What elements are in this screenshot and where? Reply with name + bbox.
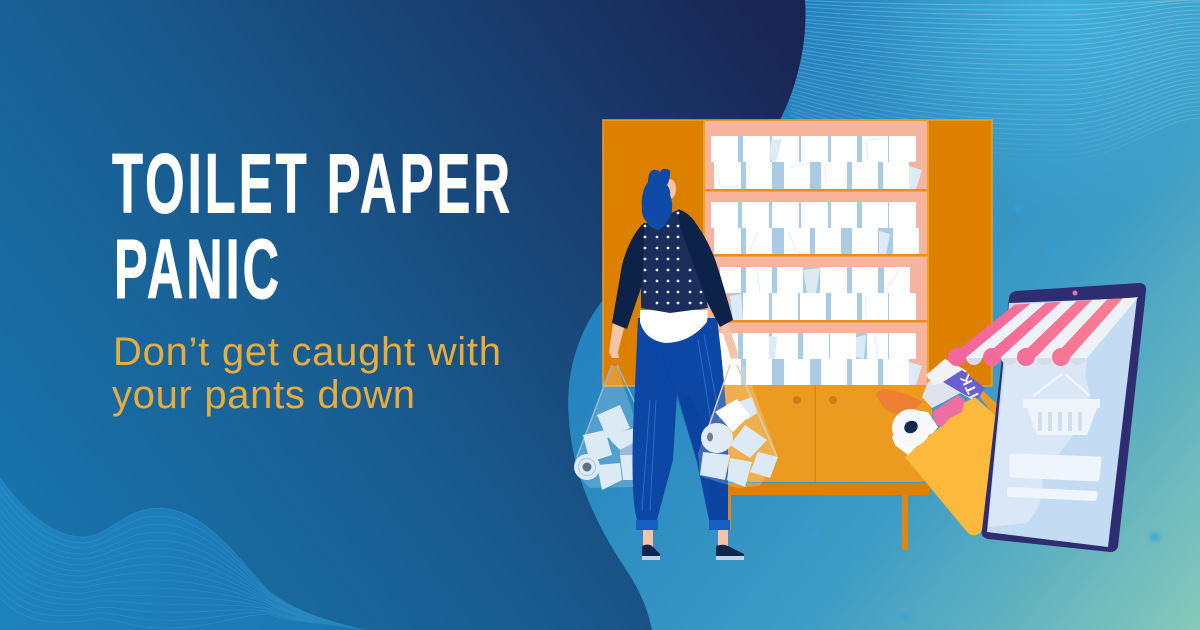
tablet shop [948, 283, 1146, 552]
trousers [632, 318, 730, 530]
white shirt hem [640, 310, 708, 343]
left bag of toilet paper [574, 365, 637, 490]
basket icon [1023, 374, 1100, 435]
screen light panel [988, 358, 1089, 527]
bag back flap [980, 390, 998, 417]
tablet screen [987, 298, 1137, 547]
background: right teal blob [560, 0, 1200, 630]
title: PANIC [114, 222, 282, 316]
subtitle: Don’t get caught with [113, 330, 501, 374]
background wave: bottom left [0, 478, 365, 630]
toilet paper packs on shelves [711, 136, 922, 385]
cabinet [603, 120, 992, 550]
subtitle [112, 330, 501, 417]
shelf unit [703, 120, 929, 386]
cabinet base with doors [723, 385, 932, 550]
screen button small [1010, 490, 1095, 498]
screen button large [1012, 456, 1099, 479]
cabinet side panels [603, 120, 992, 386]
title: TOILET PAPER [112, 136, 513, 230]
pink item [932, 395, 965, 427]
hair [642, 169, 672, 230]
baguette [876, 389, 923, 415]
shoes [642, 544, 744, 560]
tablet frame [982, 283, 1146, 552]
paper bag body [905, 397, 997, 535]
toilet paper roll [892, 409, 938, 455]
milk carton [922, 359, 985, 408]
striped awning [948, 297, 1138, 366]
shopper woman [574, 169, 778, 560]
woman skin: arms, ankles, face [609, 179, 738, 548]
tablet camera [1072, 290, 1078, 296]
grocery bag [876, 359, 998, 535]
milk carton: ITK [956, 371, 982, 401]
sweater with dots [612, 209, 733, 329]
subtitle: your pants down [112, 373, 415, 417]
title [112, 136, 513, 316]
right bag of toilet paper [698, 365, 778, 488]
